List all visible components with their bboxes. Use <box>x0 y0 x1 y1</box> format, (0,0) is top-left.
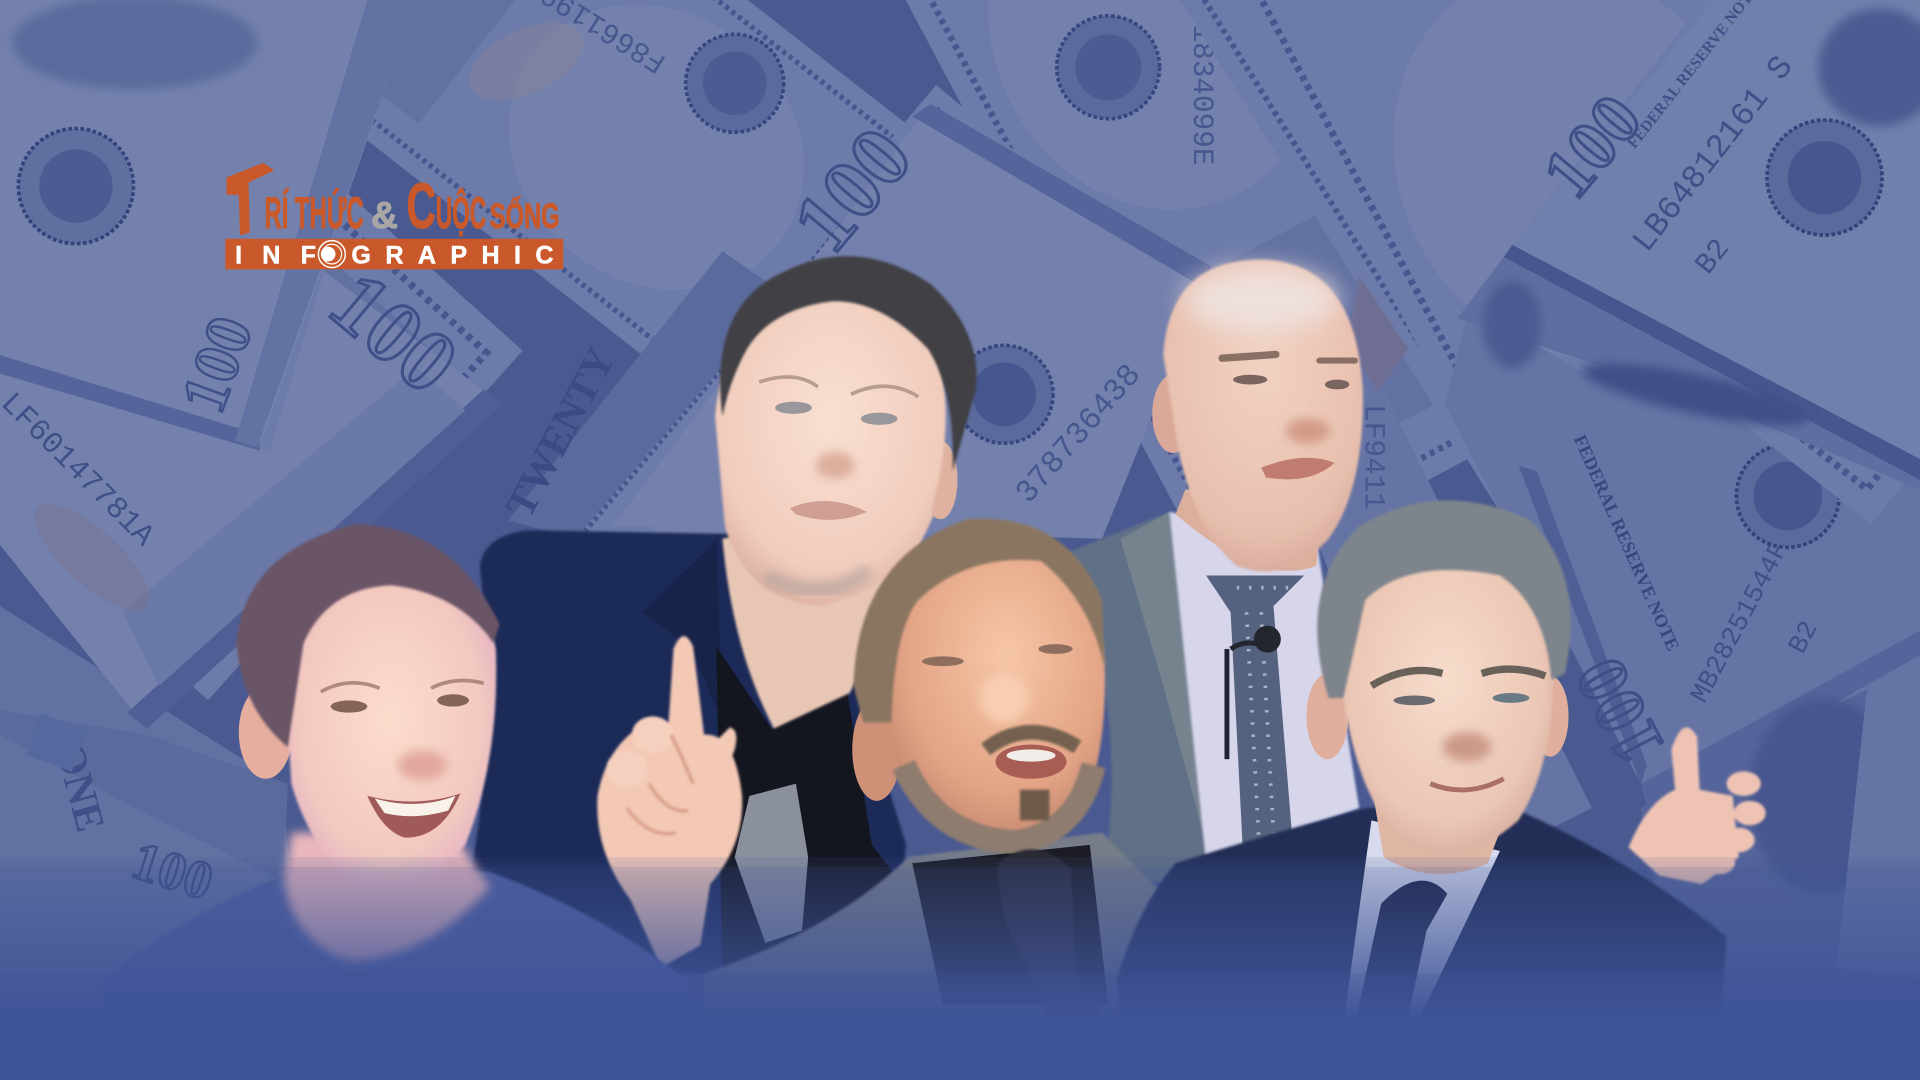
logo: Tri thức & Cuộc sống Infographic <box>225 163 563 269</box>
eyes nose mouth <box>759 377 918 589</box>
bill: right centre: MB28251544F <box>1686 537 1796 708</box>
bill: centre with 100 numeral: 378736438 <box>1009 358 1149 511</box>
bill: top centre right: 1834099E <box>1185 24 1218 166</box>
ear <box>239 686 293 779</box>
bill: far top right strip: RESERVE NOTE <box>1310 0 1496 259</box>
suit <box>704 833 1169 1016</box>
hair <box>720 256 977 471</box>
bill: top right: 100 <box>1528 81 1657 212</box>
bill: right of centre LF serial <box>1298 276 1592 882</box>
bill: top centre <box>200 0 1049 507</box>
brows eyes nose mouth <box>1218 351 1358 479</box>
ears <box>1307 673 1569 759</box>
person: back centre, dark-haired man in navy jacket <box>471 256 977 980</box>
T-shirt <box>104 872 686 1022</box>
head <box>1337 539 1553 851</box>
bill: centre with 100 numeral <box>440 85 1212 887</box>
bill: top right: B2 <box>1689 233 1737 281</box>
shirt <box>1344 820 1500 1016</box>
eyes brows nose mouth <box>321 681 484 838</box>
logo GRAPHIC label: GRAPHIC <box>351 241 553 269</box>
bill: lower left: ONE <box>45 738 113 837</box>
bill: centre with 100 numeral: TWENTY <box>497 340 625 525</box>
logo word Cuộc: UỘC <box>436 187 486 238</box>
right ear <box>923 441 958 519</box>
bill: top right <box>1457 0 1920 524</box>
bill: right centre: 100 <box>1561 645 1679 776</box>
eyes brows mouth <box>922 644 1073 779</box>
T-shirt <box>716 647 900 980</box>
person: front left, smiling man in blue T-shirt <box>104 524 686 1022</box>
microphone <box>1224 626 1281 759</box>
ear <box>1152 375 1194 453</box>
tie <box>1206 576 1304 851</box>
person: back right, bald man in grey suit <box>1065 260 1363 882</box>
bill: left centre: 100 <box>312 252 476 413</box>
bill: left centre <box>0 0 523 729</box>
beard <box>904 732 1093 842</box>
hair <box>853 519 1104 722</box>
face <box>284 576 496 893</box>
suit <box>1065 512 1224 882</box>
logo wordmark: RÍ THỨC <box>264 188 364 238</box>
bill: top right: LB64812161 S <box>1625 49 1801 260</box>
T-shirt print <box>735 784 808 943</box>
neck <box>1371 784 1518 874</box>
bill: lower left: 100 <box>125 830 220 912</box>
logo ring icon <box>318 241 345 268</box>
ear <box>852 698 901 801</box>
person: front centre, man with goatee at microphone <box>704 519 1169 1016</box>
head <box>715 294 946 606</box>
shirt <box>1169 512 1359 863</box>
suit <box>1117 802 1727 1022</box>
jacket <box>471 530 906 980</box>
bill: lower left <box>0 606 294 1080</box>
logo INFOGRAPHIC label: INF <box>235 241 316 269</box>
head <box>884 551 1105 848</box>
logo orange bar <box>225 239 563 269</box>
raised hand <box>1629 727 1766 884</box>
hair <box>236 524 500 747</box>
bill: top left <box>0 0 416 451</box>
curled fingers <box>632 716 673 753</box>
bill: bottom right with portrait <box>1641 661 1920 1080</box>
neck <box>284 833 490 961</box>
neck <box>1176 490 1322 571</box>
bill: right centre: FEDERAL RESERVE NOTE <box>1570 432 1683 654</box>
bill: right centre <box>1155 0 1920 808</box>
logo word Cuộc: C <box>407 171 436 242</box>
brows eyes nose mouth <box>1371 669 1545 790</box>
lapel shading <box>1120 512 1212 857</box>
bill: right centre: B2 <box>1784 617 1826 659</box>
logo word sống: SỐNG <box>490 196 560 236</box>
person: front right, grey-haired man in dark suit <box>1117 500 1766 1022</box>
logo ampersand: & <box>371 195 398 236</box>
bill: right of centre LF serial: LF9411 <box>1356 404 1389 510</box>
bald scalp highlight <box>1185 268 1337 332</box>
bill: centre with 100 numeral: 100 <box>774 110 930 269</box>
head <box>1163 260 1363 572</box>
logo word Cuộc <box>407 171 486 242</box>
bill: top centre right <box>771 0 1580 591</box>
bottom gradient fade <box>0 857 1920 1080</box>
tie <box>1357 881 1447 1016</box>
bill: top left: 100 <box>167 307 266 421</box>
lapel <box>643 534 722 722</box>
logo T mark <box>227 163 274 235</box>
neck <box>722 496 943 729</box>
pointing hand <box>597 636 742 967</box>
hair <box>1317 500 1571 698</box>
microphone <box>998 849 1102 1016</box>
black shirt <box>912 845 1108 1004</box>
